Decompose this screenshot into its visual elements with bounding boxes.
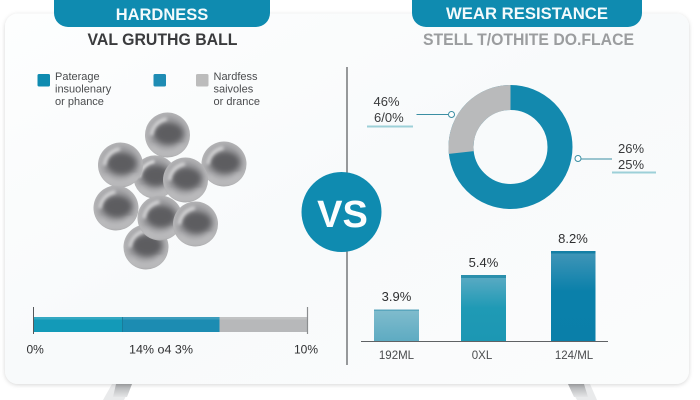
legend item: teal one: [38, 71, 112, 108]
bar labels: 0%: [26, 342, 44, 356]
bar: 3.9%: 192ML: [379, 350, 415, 362]
legend item: teal one: insuolenary: [55, 84, 112, 96]
legend item: grey: saivoles: [214, 84, 254, 96]
icon: VS badge: VS: [317, 194, 368, 236]
icon: cluster of steel balls: [94, 112, 246, 270]
icon: VS badge: [302, 172, 382, 252]
legend: [38, 71, 260, 108]
axis: [361, 340, 608, 342]
bar: 8.2%: [551, 231, 596, 362]
legend item: teal two: [154, 74, 166, 86]
subtitle: right: STELL T/OTHITE DO.FLACE: [423, 31, 634, 49]
heading: hardness pill: [54, 0, 270, 27]
callout: donut left: [367, 94, 454, 126]
legend item: teal one: Paterage: [55, 71, 100, 83]
heading: wear resistance pill: [412, 0, 642, 27]
callout: donut right: [575, 141, 656, 172]
legend item: teal one: or phance: [55, 96, 104, 108]
bar: 3.9%: 3.9%: [382, 289, 412, 304]
callout: donut left: 6/0%: [374, 110, 404, 125]
bar: 8.2%: 124/ML: [555, 350, 594, 362]
bar: 5.4%: [461, 255, 506, 362]
bar labels: [26, 342, 318, 356]
legend item: grey: [196, 71, 260, 108]
bar labels: 14% o4 3%: [129, 342, 193, 356]
icon: left stand leg: [103, 384, 132, 400]
heading: hardness pill: HARDNESS: [116, 6, 208, 24]
legend item: grey: or drance: [214, 96, 260, 108]
chart: stacked horizontal bar: [26, 307, 318, 356]
callout: donut right: 25%: [618, 157, 644, 172]
subtitle: left: VAL GRUTHG BALL: [88, 31, 238, 49]
heading: wear resistance pill: WEAR RESISTANCE: [446, 5, 608, 23]
icon: right stand leg: [568, 384, 597, 400]
chart: column bars: [361, 231, 608, 362]
bar: 3.9%: [374, 289, 419, 362]
legend item: grey: Nardfess: [214, 71, 258, 83]
chart: donut: [461, 98, 560, 196]
callout: donut right: 26%: [618, 141, 644, 156]
bar: 8.2%: 8.2%: [558, 231, 588, 246]
bar: 5.4%: 0XL: [472, 350, 493, 362]
callout: donut left: 46%: [374, 94, 400, 109]
bar: 5.4%: 5.4%: [469, 255, 499, 270]
bar labels: 10%: [294, 342, 318, 356]
